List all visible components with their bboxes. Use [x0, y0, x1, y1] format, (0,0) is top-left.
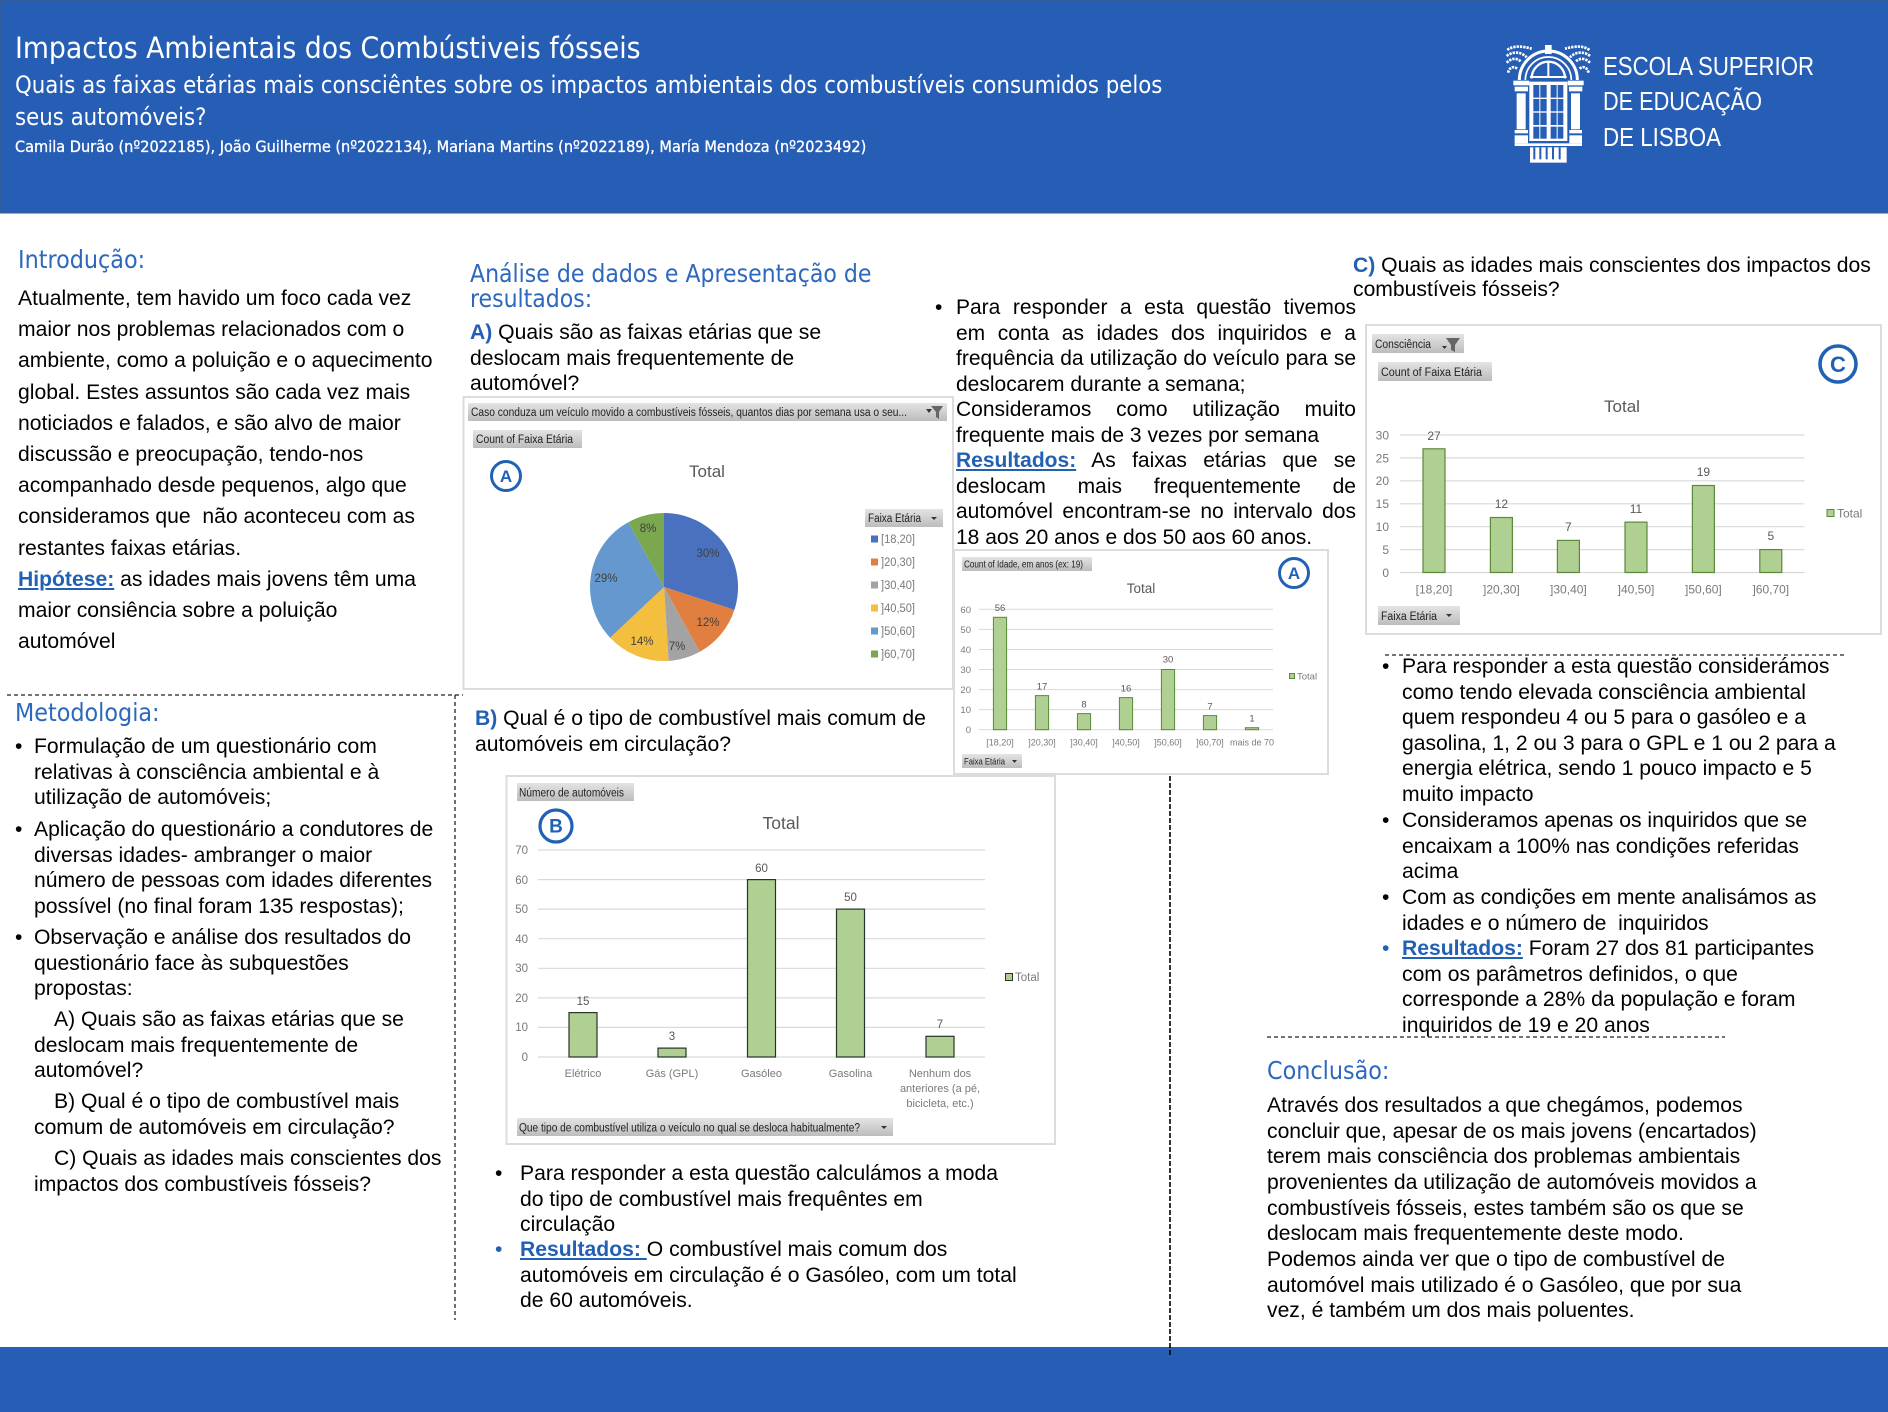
- text: introduction: [18, 287, 433, 653]
- y axis labels: 0: [966, 725, 971, 736]
- text: conclusion: [1267, 1094, 1757, 1322]
- legend: ]50,60]: [881, 626, 915, 638]
- list: metodologia: Aplicação do questionário a condutores de: [34, 818, 433, 841]
- list: metodologia: •: [15, 735, 22, 758]
- field button: [517, 783, 634, 801]
- authors: Camila Durão (nº2022185), João Guilherme (nº2022134), Mariana Martins (nº2022189), María Mendoza (nº2023492): [15, 137, 866, 156]
- list: awareness results: •: [1382, 809, 1389, 832]
- x axis labels: Gás (GPL): [646, 1068, 698, 1080]
- list: fuel results: Resultados: O combustível mais comum dos: [520, 1238, 947, 1261]
- text: introduction: discussão e preocupação, tendo-nos: [18, 443, 363, 466]
- y axis labels: 20: [960, 685, 971, 696]
- list: awareness results: muito impacto: [1402, 783, 1534, 806]
- value labels: 56: [995, 603, 1005, 614]
- text: conclusion: combustíveis fósseis, estes também são os que se: [1267, 1197, 1744, 1220]
- list: awareness results: Com as condições em mente analisámos as: [1402, 886, 1816, 909]
- y axis labels: 15: [1376, 497, 1389, 511]
- value labels: 27: [1427, 429, 1441, 443]
- legend: Total: [1015, 972, 1039, 984]
- list: age and frequency results: deslocam mais frequentemente de: [956, 475, 1356, 498]
- value labels: 8: [1081, 700, 1087, 710]
- text: introduction: noticiados e falados, e são alvo de maior: [18, 412, 401, 435]
- heading: metodologia: Metodologia:: [15, 698, 160, 727]
- x axis labels: ]60,70]: [1196, 738, 1224, 748]
- text: conclusion: deslocam mais frequentemente deste modo.: [1267, 1222, 1684, 1245]
- x axis labels: ]20,30]: [1483, 582, 1520, 596]
- question C: [1353, 254, 1871, 301]
- x axis labels: mais de 70: [1230, 738, 1274, 748]
- x axis labels: [1416, 582, 1789, 596]
- list: age and frequency results: em conta as idades dos inquiridos e a: [956, 322, 1356, 345]
- logo wordmark: DE EDUCAÇÃO: [1603, 86, 1762, 116]
- chart title: Total: [689, 462, 725, 481]
- badge A: [492, 462, 520, 490]
- axis field button: [962, 754, 1022, 768]
- x axis labels: [986, 738, 1274, 748]
- text: introduction: automóvel: [18, 630, 115, 653]
- question A: A) Quais são as faixas etárias que se: [470, 321, 821, 344]
- list: awareness results: encaixam a 100% nas condições referidas: [1402, 835, 1799, 858]
- pie labels: 8%: [640, 523, 656, 535]
- value labels: 3: [669, 1031, 675, 1043]
- list: fuel results: do tipo de combustível mais frequêntes em: [520, 1188, 923, 1211]
- badge B: [540, 810, 572, 842]
- list: awareness results: gasolina, 1, 2 ou 3 para o GPL e 1 ou 2 para a: [1402, 732, 1836, 755]
- heading: introdução: Introdução:: [18, 245, 145, 274]
- y axis labels: 60: [515, 875, 528, 887]
- chart title: Total: [763, 813, 799, 833]
- list: metodologia: B) Qual é o tipo de combustível mais: [54, 1090, 399, 1113]
- x axis labels: ]30,40]: [1070, 738, 1098, 748]
- text: introduction: acompanhado desde pequenos, algo que: [18, 474, 407, 497]
- list: age and frequency results: deslocarem durante a semana;: [956, 373, 1246, 396]
- y axis labels: 30: [1376, 428, 1389, 442]
- list: awareness results: Consideramos apenas os inquiridos que se: [1402, 809, 1807, 832]
- x axis labels: ]50,60]: [1154, 738, 1182, 748]
- value labels: 7: [1565, 520, 1572, 534]
- chart title: Total: [1604, 397, 1640, 416]
- legend: ]40,50]: [881, 603, 915, 615]
- value labels: 11: [1630, 502, 1643, 516]
- logo wordmark: ESCOLA SUPERIOR: [1603, 51, 1814, 81]
- pie labels: 30%: [696, 548, 720, 560]
- text: conclusion: provenientes da utilização de automóveis movidos a: [1267, 1171, 1757, 1194]
- list: awareness results: •: [1382, 655, 1389, 678]
- list: fuel results: automóveis em circulação é o Gasóleo, com um total: [520, 1264, 1017, 1287]
- list: age and frequency results: automóvel encontram-se no intervalo dos: [956, 500, 1356, 523]
- list: metodologia: diversas idades- ambranger o maior: [34, 844, 372, 867]
- list: metodologia: número de pessoas com idades diferentes: [34, 869, 432, 892]
- badge A: [1280, 558, 1308, 588]
- chart C: awareness by age: [1366, 325, 1881, 634]
- value labels: 17: [1037, 682, 1047, 692]
- legend: Faixa Etária: [868, 513, 922, 525]
- footer band: [0, 1347, 1888, 1412]
- list: metodologia: A) Quais são as faixas etárias que se: [54, 1008, 404, 1031]
- x axis labels: [18,20]: [1416, 582, 1452, 596]
- value labels: [995, 603, 1255, 724]
- list: fuel results: •: [495, 1238, 502, 1261]
- text: conclusion: Através dos resultados a que chegámos, podemos: [1267, 1094, 1743, 1117]
- y axis labels: 0: [522, 1052, 528, 1064]
- text: conclusion: automóvel mais utilizado é o Gasóleo, que por sua: [1267, 1274, 1741, 1297]
- list: metodologia: •: [15, 818, 22, 841]
- x axis labels: bicicleta, etc.): [906, 1098, 974, 1110]
- list: metodologia: propostas:: [34, 977, 133, 1000]
- filter field button: [468, 403, 947, 421]
- text: introduction: maior nos problemas relacionados com o: [18, 318, 404, 341]
- list: awareness results: corresponde a 28% da população e foram: [1402, 988, 1795, 1011]
- y axis labels: 5: [1382, 543, 1389, 557]
- list: metodologia: automóvel?: [34, 1059, 143, 1082]
- y axis labels: 50: [515, 904, 528, 916]
- list: awareness results: Resultados: Foram 27 dos 81 participantes: [1402, 937, 1814, 960]
- value labels: 30: [1163, 654, 1173, 666]
- logo: Escola Superior de Educação de Lisboa: [1507, 45, 1814, 163]
- x axis labels: Gasolina: [829, 1068, 873, 1080]
- legend: [18,20]: [881, 534, 915, 546]
- axis field button: [1378, 606, 1460, 625]
- y axis labels: 30: [960, 665, 971, 676]
- list: age and frequency results: [935, 296, 1356, 549]
- y axis labels: 20: [1376, 474, 1389, 488]
- heading: análise de dados: Análise de dados e Apresentação de: [470, 259, 871, 288]
- y axis labels: 10: [1376, 520, 1389, 534]
- text: introduction: ambiente, como a poluição e o aquecimento: [18, 349, 433, 372]
- icon: window emblem: [1507, 45, 1590, 163]
- x axis labels: ]40,50]: [1112, 738, 1140, 748]
- x axis labels: Nenhum dos: [909, 1068, 972, 1080]
- heading: conclusão: Conclusão:: [1267, 1056, 1389, 1085]
- badge C: [1820, 346, 1856, 382]
- y axis labels: 60: [960, 605, 971, 616]
- text: introduction: maior consiência sobre a poluição: [18, 599, 337, 622]
- bars: [993, 617, 1259, 730]
- axis field button: Que tipo de combustível utiliza o veículo no qual se desloca habitualmente?: [519, 1122, 860, 1134]
- list: metodologia: [15, 735, 441, 1196]
- list: metodologia: •: [15, 926, 22, 949]
- list: awareness results: [1382, 655, 1836, 1037]
- list: awareness results: Para responder a esta questão considerámos: [1402, 655, 1829, 678]
- badge C: C: [1830, 352, 1846, 377]
- list: awareness results: •: [1382, 886, 1389, 909]
- list: awareness results: quem respondeu 4 ou 5 para o gasóleo e a: [1402, 706, 1806, 729]
- y axis labels: 40: [515, 934, 528, 946]
- pie labels: 12%: [696, 617, 720, 629]
- pie labels: [594, 523, 720, 653]
- question C: C) Quais as idades mais conscientes dos impactos dos: [1353, 254, 1871, 277]
- y axis labels: 50: [960, 625, 971, 636]
- x axis labels: [18,20]: [986, 738, 1014, 748]
- y axis labels: 70: [515, 845, 528, 857]
- list: awareness results: energia elétrica, sendo 1 pouco impacto e 5: [1402, 757, 1812, 780]
- question C: combustíveis fósseis?: [1353, 278, 1560, 301]
- x axis labels: ]20,30]: [1028, 738, 1056, 748]
- subtitle question: seus automóveis?: [15, 103, 206, 131]
- list: fuel results: Para responder a esta questão calculámos a moda: [520, 1162, 998, 1185]
- filter button: [1372, 334, 1464, 353]
- value labels: 15: [577, 996, 589, 1008]
- value labels: 7: [937, 1019, 943, 1031]
- list: age and frequency results: Consideramos como utilização muito: [956, 398, 1356, 421]
- list: age and frequency results: 18 aos 20 anos e dos 50 aos 60 anos.: [956, 526, 1312, 549]
- y axis labels: 20: [515, 993, 528, 1005]
- list: metodologia: possível (no final foram 135 respostas);: [34, 895, 404, 918]
- x axis labels: ]30,40]: [1550, 582, 1587, 596]
- question B: automóveis em circulação?: [475, 733, 731, 756]
- heading: análise de dados: resultados:: [470, 284, 592, 313]
- list: metodologia: questionário face às subquestões: [34, 952, 349, 975]
- x axis labels: ]50,60]: [1685, 582, 1722, 596]
- pie labels: 14%: [630, 636, 654, 648]
- chart A2: bars by age: [954, 550, 1328, 774]
- badge A: A: [1288, 564, 1300, 583]
- text: conclusion: vez, é também um dos mais poluentes.: [1267, 1299, 1635, 1322]
- logo wordmark: DE LISBOA: [1603, 122, 1722, 152]
- filter button: Consciência: [1375, 339, 1432, 351]
- chart B: fuel type bars: [506, 776, 1055, 1144]
- y axis labels: 10: [960, 705, 971, 716]
- list: awareness results: •: [1382, 937, 1389, 960]
- list: age and frequency results: frequente mais de 3 vezes por semana: [956, 424, 1319, 447]
- header band: [0, 0, 1888, 213]
- value labels: [1427, 429, 1774, 543]
- list: metodologia: utilização de automóveis;: [34, 786, 271, 809]
- pie labels: 7%: [669, 641, 685, 653]
- list: age and frequency results: Resultados: As faixas etárias que se: [956, 449, 1356, 472]
- list: metodologia: Observação e análise dos resultados do: [34, 926, 411, 949]
- text: conclusion: terem mais consciência dos problemas ambientais: [1267, 1145, 1740, 1168]
- list: fuel results: de 60 automóveis.: [520, 1289, 693, 1312]
- list: metodologia: impactos dos combustíveis fósseis?: [34, 1173, 371, 1196]
- y axis labels: 25: [1376, 452, 1389, 466]
- x axis labels: anteriores (a pé,: [900, 1083, 980, 1095]
- pie slices: [590, 513, 738, 661]
- chart A: pie of age groups: [464, 397, 953, 689]
- list: metodologia: comum de automóveis em circulação?: [34, 1116, 394, 1139]
- value labels: 5: [1767, 529, 1774, 543]
- y axis labels: 0: [1382, 566, 1389, 580]
- legend: ]60,70]: [881, 649, 915, 661]
- text: conclusion: concluir que, apesar de os mais jovens (encartados): [1267, 1120, 1757, 1143]
- logo wordmark: [1603, 51, 1814, 152]
- subtitle question: [15, 71, 1162, 131]
- count button: Count of Idade, em anos (ex: 19): [964, 560, 1083, 570]
- list: awareness results: inquiridos de 19 e 20 anos: [1402, 1014, 1650, 1037]
- text: conclusion: Podemos ainda ver que o tipo de combustível de: [1267, 1248, 1725, 1271]
- count button: [1378, 362, 1492, 381]
- y axis labels: [1376, 428, 1389, 580]
- heading: análise de dados: [470, 259, 871, 313]
- y axis labels: 10: [515, 1022, 528, 1034]
- x axis labels: [565, 1068, 980, 1110]
- list: awareness results: como tendo elevada consciência ambiental: [1402, 681, 1806, 704]
- list: age and frequency results: •: [935, 296, 942, 319]
- chart title: Total: [1127, 581, 1155, 596]
- value labels: 1: [1249, 714, 1255, 724]
- legend: [865, 509, 943, 661]
- text: introduction: Atualmente, tem havido um foco cada vez: [18, 287, 411, 310]
- list: metodologia: Formulação de um questionário com: [34, 735, 377, 758]
- question A: deslocam mais frequentemente de: [470, 347, 794, 370]
- field button: Número de automóveis: [519, 788, 624, 800]
- y axis labels: 30: [515, 963, 528, 975]
- value labels: 16: [1121, 684, 1131, 694]
- legend: ]30,40]: [881, 580, 915, 592]
- legend: Total: [1837, 506, 1862, 520]
- y axis labels: 40: [960, 645, 971, 656]
- text: introduction: restantes faixas etárias.: [18, 537, 241, 560]
- list: fuel results: circulação: [520, 1213, 615, 1236]
- list: fuel results: [495, 1162, 1017, 1312]
- count button: Count of Faixa Etária: [476, 434, 574, 446]
- list: awareness results: idades e o número de inquiridos: [1402, 912, 1709, 935]
- value labels: 19: [1697, 465, 1710, 479]
- count button: [473, 430, 582, 448]
- x axis labels: Elétrico: [565, 1068, 601, 1080]
- list: age and frequency results: frequência da utilização do veículo para se: [956, 347, 1356, 370]
- x axis labels: ]60,70]: [1752, 582, 1789, 596]
- axis field button: Faixa Etária: [964, 756, 1006, 768]
- pie labels: 29%: [594, 573, 618, 585]
- legend: ]20,30]: [881, 557, 915, 569]
- y axis labels: [515, 845, 528, 1064]
- list: fuel results: •: [495, 1162, 502, 1185]
- bars: [569, 880, 954, 1057]
- value labels: 12: [1495, 497, 1508, 511]
- list: metodologia: relativas à consciência ambiental e à: [34, 761, 379, 784]
- axis field button: Faixa Etária: [1381, 611, 1438, 623]
- filter field button: Caso conduza um veículo movido a combustíveis fósseis, quantos dias por semana usa o seu...: [471, 407, 907, 419]
- question B: B) Qual é o tipo de combustível mais comum de: [475, 707, 926, 730]
- count button: [962, 557, 1092, 571]
- title: Impactos Ambientais dos Combústiveis fósseis: [15, 31, 641, 66]
- count button: Count of Faixa Etária: [1381, 367, 1483, 379]
- bars: [1423, 449, 1782, 572]
- value labels: 7: [1207, 702, 1213, 712]
- text: introduction: consideramos que não aconteceu com as: [18, 505, 415, 528]
- legend: Total: [1297, 672, 1317, 682]
- badge B: B: [549, 816, 563, 838]
- text: introduction: global. Estes assuntos são cada vez mais: [18, 381, 410, 404]
- x axis labels: ]40,50]: [1618, 582, 1654, 596]
- axis field button: [517, 1118, 893, 1136]
- subtitle question: Quais as faixas etárias mais consciêntes sobre os impactos ambientais dos combustíveis consumidos pelos: [15, 71, 1162, 99]
- value labels: 50: [844, 892, 857, 904]
- list: metodologia: deslocam mais frequentemente de: [34, 1034, 358, 1057]
- value labels: 60: [755, 863, 768, 875]
- x axis labels: Gasóleo: [741, 1068, 782, 1080]
- question A: [470, 321, 821, 395]
- question A: automóvel?: [470, 372, 579, 395]
- text: introduction: Hipótese: as idades mais jovens têm uma: [18, 568, 416, 591]
- y axis labels: [960, 605, 971, 736]
- badge A: A: [500, 467, 512, 486]
- value labels: [577, 863, 943, 1043]
- question B: [475, 707, 926, 756]
- list: awareness results: acima: [1402, 860, 1458, 883]
- list: metodologia: C) Quais as idades mais conscientes dos: [54, 1147, 441, 1170]
- list: awareness results: com os parâmetros definidos, o que: [1402, 963, 1738, 986]
- list: age and frequency results: Para responder a esta questão tivemos: [956, 296, 1356, 319]
